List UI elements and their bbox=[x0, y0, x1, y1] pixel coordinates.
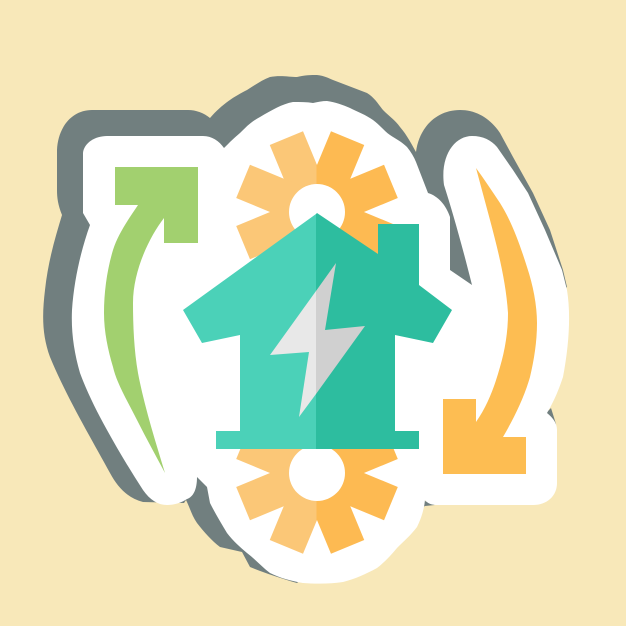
icon: house bbox=[183, 213, 452, 449]
white sticker border bbox=[72, 101, 569, 584]
icon: top gear bbox=[236, 131, 398, 259]
icon: bottom gear bbox=[236, 449, 398, 554]
icon: green curved arrow bbox=[104, 167, 198, 473]
icon: orange curved arrow bbox=[443, 168, 537, 474]
sticker illustration bbox=[43, 75, 570, 584]
icon: lightning bolt bbox=[270, 263, 365, 417]
sticker shadow bbox=[43, 75, 567, 583]
